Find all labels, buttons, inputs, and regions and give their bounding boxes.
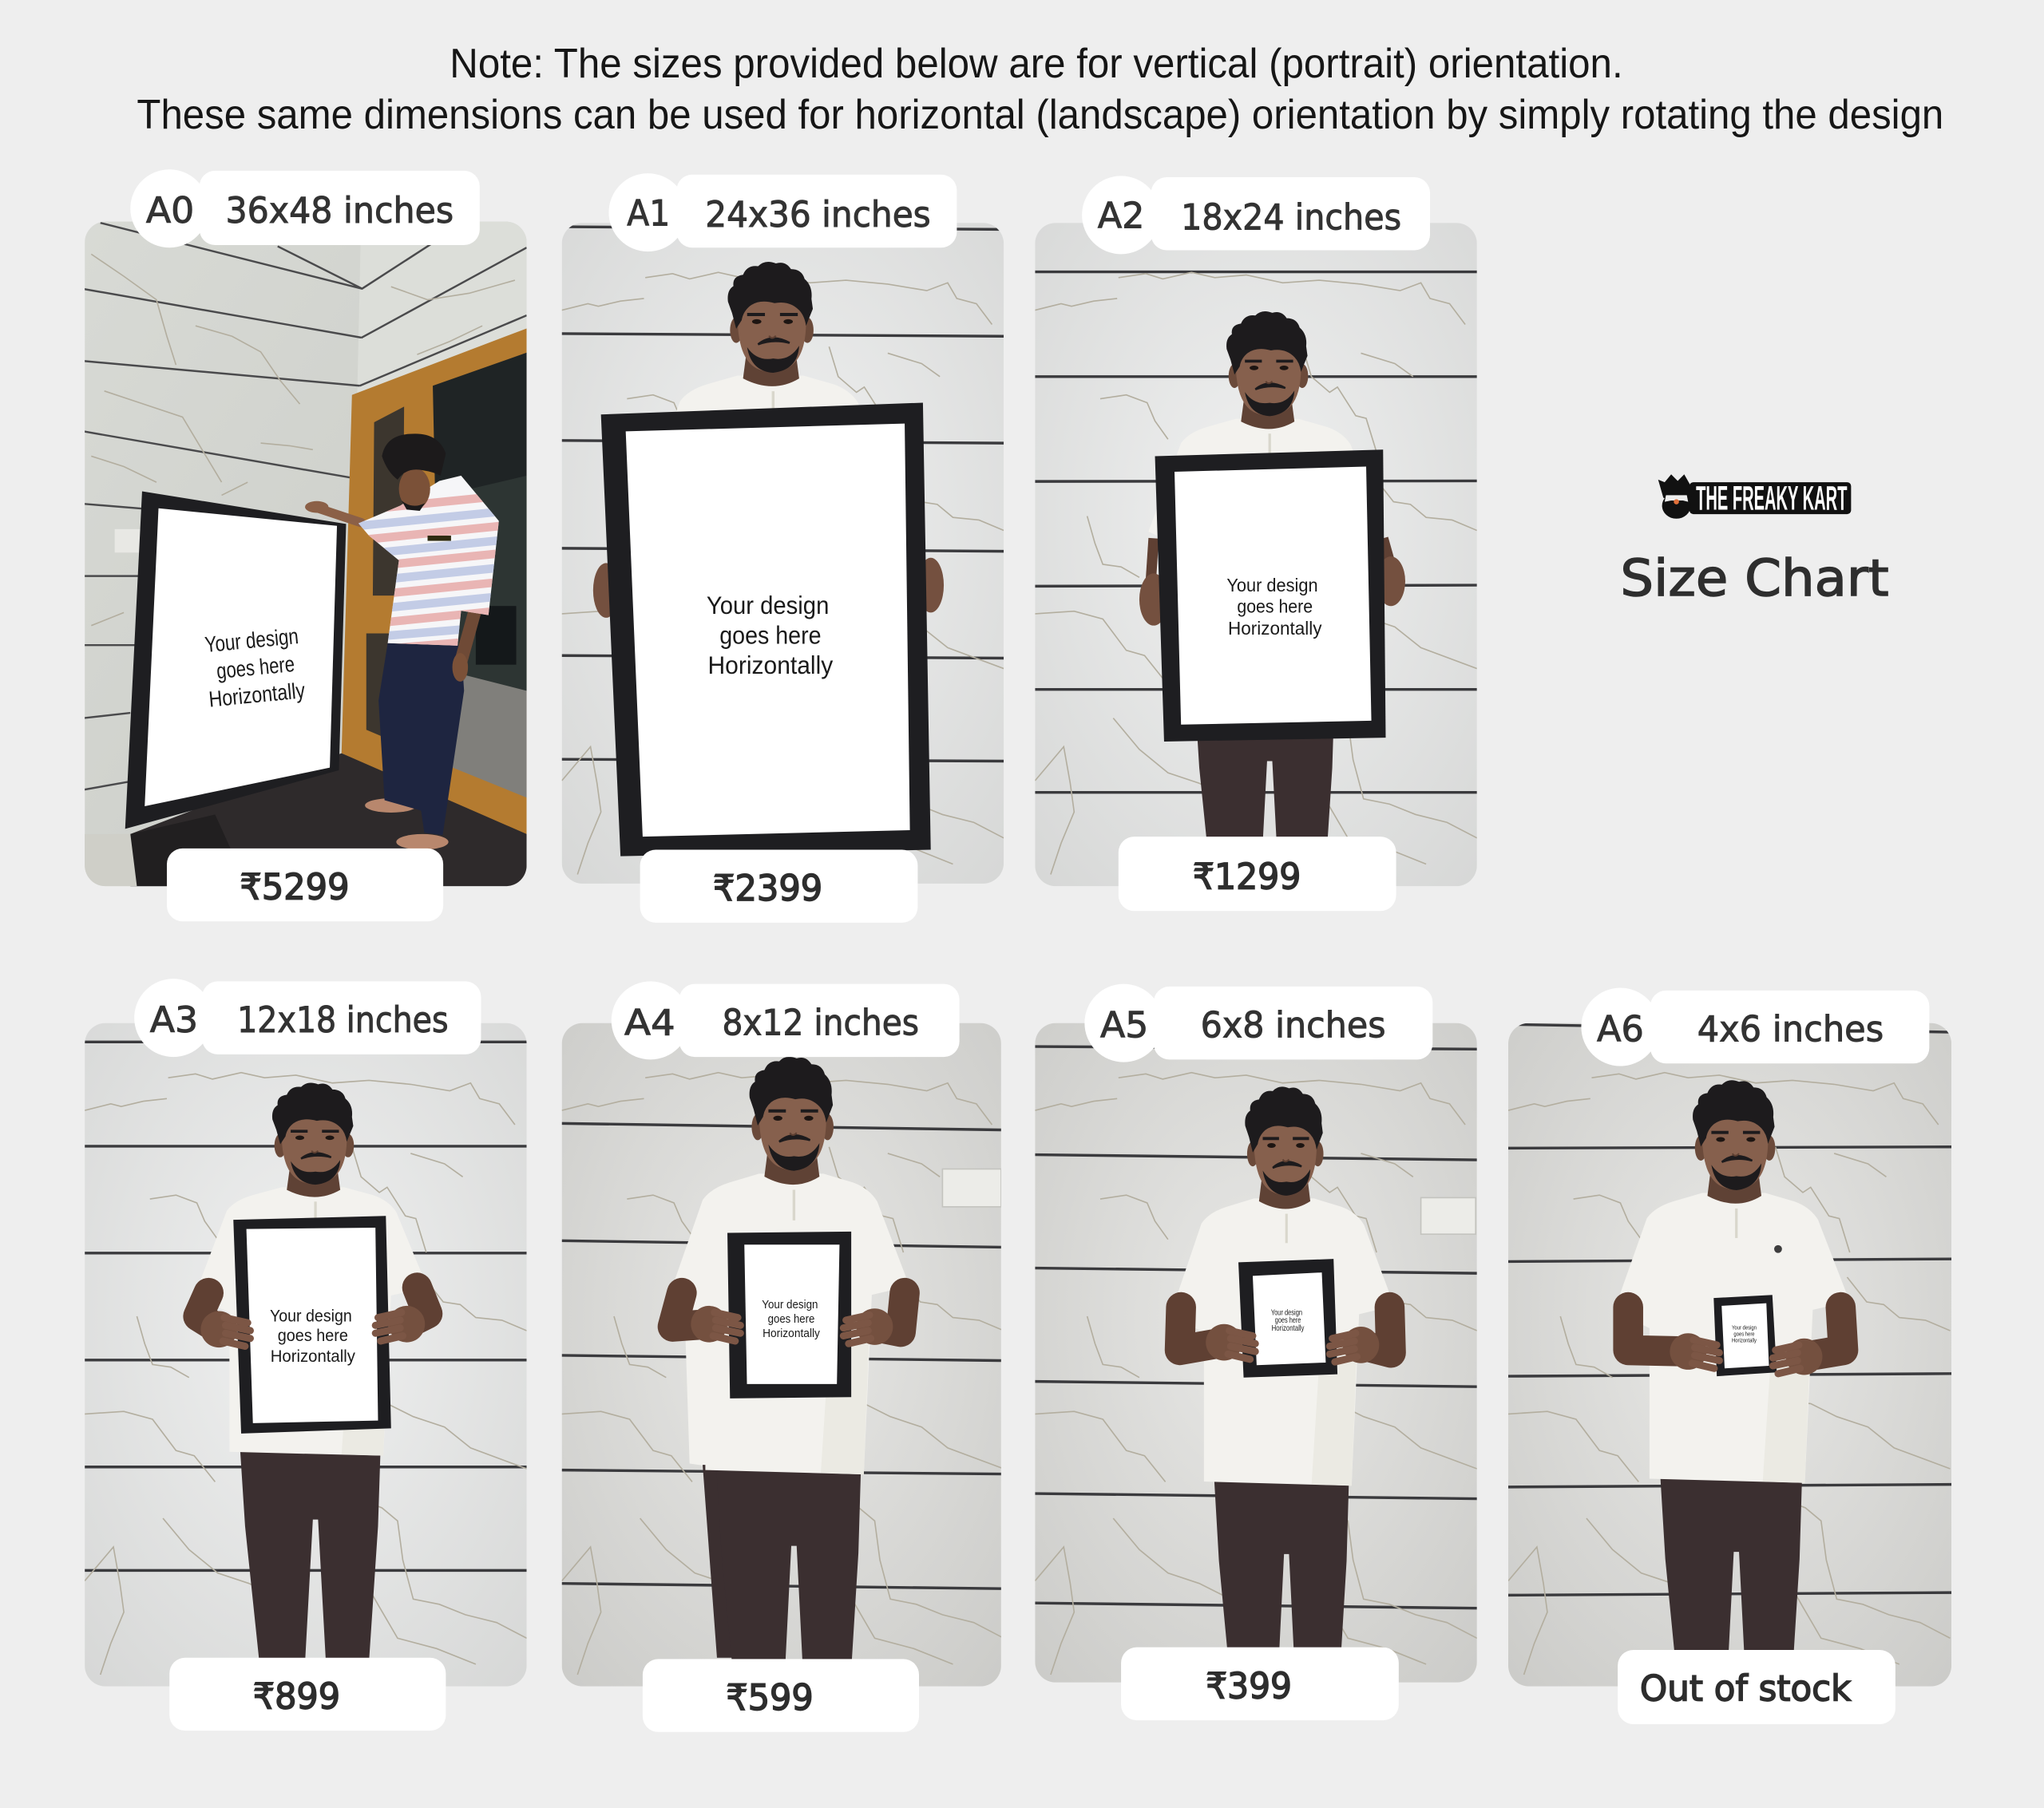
- man: [194, 1083, 428, 1663]
- wall switch: [1421, 1197, 1476, 1234]
- frame: Horizontally: [763, 1327, 821, 1340]
- label: A4 size: A4: [624, 1001, 675, 1043]
- label: A4 size: 8x12 inches: [722, 1001, 919, 1043]
- label: A1 size: [608, 173, 957, 251]
- label: A4 size: [612, 981, 960, 1059]
- leaning frame: [125, 492, 346, 829]
- leaning frame: Horizontally: [208, 678, 306, 712]
- label: A5 size: [1084, 984, 1432, 1062]
- price: A6 out of stock: Out of stock: [1640, 1668, 1851, 1710]
- large frame: Horizontally: [708, 651, 834, 679]
- note heading: These same dimensions can be used for horizontal (landscape) orientation by simply rotating the design: [137, 92, 1943, 138]
- label: A2 size: [1082, 176, 1430, 254]
- label: A2 size: A2: [1098, 195, 1144, 237]
- frame: goes here: [1237, 595, 1313, 616]
- frame: Horizontally: [1732, 1337, 1757, 1344]
- label: A5 size: A5: [1100, 1004, 1148, 1046]
- label: A0 size: A0: [146, 189, 194, 231]
- wall switch: [942, 1169, 1001, 1207]
- frame: Your design: [1271, 1308, 1302, 1317]
- label: A5 size: 6x8 inches: [1201, 1004, 1386, 1046]
- price: A0: [167, 849, 443, 921]
- frame: goes here: [1275, 1316, 1301, 1325]
- heading: Size Chart: Size Chart: [1620, 549, 1889, 608]
- frame: Horizontally: [271, 1347, 355, 1366]
- man behind frame: [1148, 311, 1353, 837]
- man in striped shirt: [305, 433, 509, 849]
- frame: Horizontally: [1228, 618, 1322, 639]
- note heading: [137, 41, 1943, 138]
- logo: The Freaky Kart: [1658, 474, 1851, 519]
- label: A3 size: 12x18 inches: [237, 999, 449, 1041]
- price: A2: [1119, 837, 1396, 911]
- frame: [1238, 1259, 1337, 1378]
- price: A5: ₹399: [1206, 1664, 1292, 1707]
- label: A0 size: 36x48 inches: [225, 189, 454, 231]
- frame: goes here: [1733, 1330, 1755, 1337]
- price: A5: [1121, 1648, 1399, 1720]
- frame: [1713, 1295, 1777, 1376]
- note heading: Note: The sizes provided below are for vertical (portrait) orientation.: [450, 41, 1623, 87]
- price: A3: ₹899: [253, 1675, 340, 1717]
- panel: A5 6x8 inches: [1035, 1023, 1477, 1707]
- leaning frame: goes here: [216, 651, 295, 683]
- label: A3 size: [134, 979, 481, 1057]
- label: A6 size: [1581, 988, 1929, 1066]
- large frame: [601, 402, 931, 857]
- panel: A3 12x18 inches: [85, 1023, 527, 1687]
- large frame: Your design: [707, 591, 829, 619]
- price: A0: ₹5299: [240, 866, 350, 908]
- label: A6 size: A6: [1597, 1007, 1644, 1050]
- label: A1 size: A1: [627, 192, 670, 234]
- frame: [1155, 449, 1386, 742]
- price: A4: [643, 1659, 919, 1732]
- label: A2 size: 18x24 inches: [1181, 196, 1401, 238]
- frame: goes here: [278, 1327, 348, 1345]
- doorway: [342, 328, 527, 841]
- frame: goes here: [768, 1313, 814, 1326]
- text: THE FREAKY KART: [1696, 479, 1848, 516]
- price: A1: ₹2399: [713, 867, 822, 909]
- label: A3 size: A3: [150, 999, 198, 1041]
- price: A4: ₹599: [726, 1676, 814, 1719]
- left side of torso: [685, 1308, 706, 1466]
- man: [675, 1057, 906, 1659]
- panel: A4 8x12 inches: [562, 1023, 1004, 1707]
- label: A1 size: 24x36 inches: [705, 193, 931, 235]
- panel: A0 36x48 inches: [83, 222, 527, 886]
- man: [1614, 1080, 1850, 1707]
- label: A6 size: 4x6 inches: [1697, 1007, 1884, 1050]
- frame: [727, 1232, 851, 1399]
- man: [1178, 1086, 1389, 1648]
- large frame: goes here: [719, 622, 822, 650]
- price: A3: [169, 1658, 446, 1731]
- price: A2: ₹1299: [1193, 855, 1301, 897]
- frame: Your design: [1226, 575, 1318, 595]
- price: A6 out of stock: [1618, 1650, 1895, 1724]
- frame: Your design: [762, 1299, 818, 1311]
- panel: A6 4x6 inches: [1508, 1023, 1951, 1707]
- man behind large frame: [676, 262, 859, 412]
- label: A0 size: [130, 169, 480, 247]
- frame: [233, 1216, 391, 1434]
- frame: Your design: [1732, 1323, 1757, 1331]
- panel: A1 24x36 inches: [562, 223, 1004, 894]
- leaning frame: Your design: [204, 623, 299, 657]
- price: A1: [640, 849, 917, 923]
- frame: Your design: [270, 1308, 352, 1326]
- panel: A2 18x24 inches: [1035, 223, 1477, 909]
- frame: Horizontally: [1272, 1324, 1305, 1333]
- left leg edge: [703, 1465, 731, 1658]
